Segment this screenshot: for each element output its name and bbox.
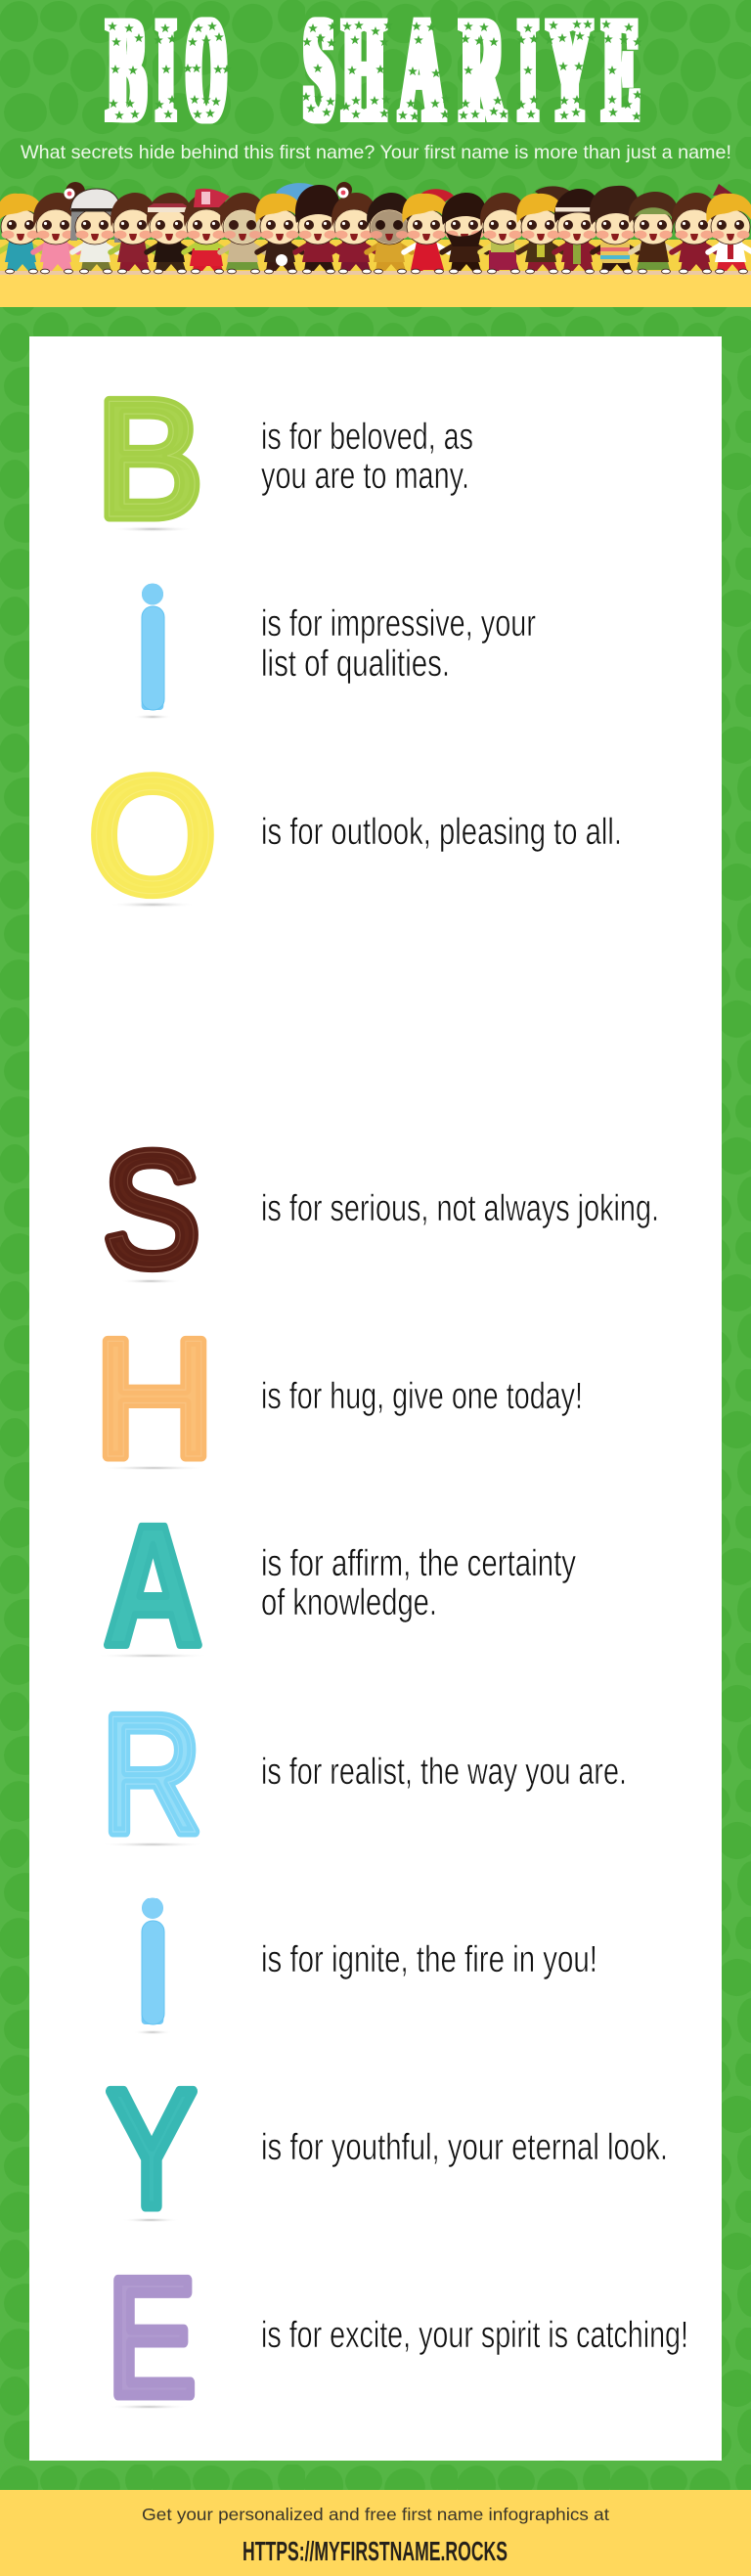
row: H: is for hug, give one today! — [261, 1376, 583, 1417]
row: I: is for impressive, your — [261, 603, 536, 644]
row: O: is for outlook, pleasing to all. — [261, 812, 622, 853]
row: S — [103, 1120, 659, 1301]
title: BIO SHARIYE — [108, 0, 642, 153]
subtitle: What secrets hide behind this first name? Your first name is more than just a name! — [21, 142, 731, 163]
row: O: O — [89, 743, 216, 927]
row: A: A — [104, 1489, 202, 1682]
panel: white content card — [29, 336, 722, 2461]
row: O: O — [89, 743, 216, 927]
row: S: S — [103, 1120, 200, 1301]
row: A — [96, 1489, 576, 1682]
row: H: H — [94, 1306, 215, 1492]
footer band: Get your personalized and free first name infographics at — [142, 2505, 609, 2524]
row: H — [94, 1306, 583, 1492]
row: I second: is for ignite, the fire in you! — [261, 1939, 597, 1980]
row: B: B — [96, 365, 203, 553]
row: H: H — [94, 1306, 215, 1492]
row: R: R — [102, 1682, 201, 1868]
row: R — [100, 1682, 627, 1868]
row: I: i — [134, 559, 171, 741]
row: Y — [107, 2055, 668, 2242]
row: A: of knowledge. — [261, 1582, 437, 1623]
row: I — [133, 559, 536, 741]
row: O — [89, 743, 622, 927]
row: I second — [133, 1874, 597, 2056]
footer band: HTTPS://MYFIRSTNAME.ROCKS — [243, 2536, 508, 2566]
row: E — [107, 2243, 688, 2430]
row: B: B — [96, 365, 203, 553]
row: S: S — [103, 1120, 200, 1301]
row: E: E — [107, 2243, 197, 2430]
illustration: row of cartoon children — [0, 182, 751, 274]
row: R: is for realist, the way you are. — [261, 1752, 627, 1793]
row: R: R — [102, 1682, 201, 1868]
row: A: is for affirm, the certainty — [261, 1543, 576, 1584]
row: B: you are to many. — [261, 456, 469, 497]
yellow banner strip — [0, 240, 751, 307]
row: I: list of qualities. — [261, 644, 450, 685]
footer band — [0, 2490, 751, 2576]
row: B — [96, 365, 473, 553]
row: B: is for beloved, as — [261, 417, 473, 458]
row: Y: Y — [107, 2055, 197, 2242]
row: I second: i — [134, 1874, 171, 2056]
